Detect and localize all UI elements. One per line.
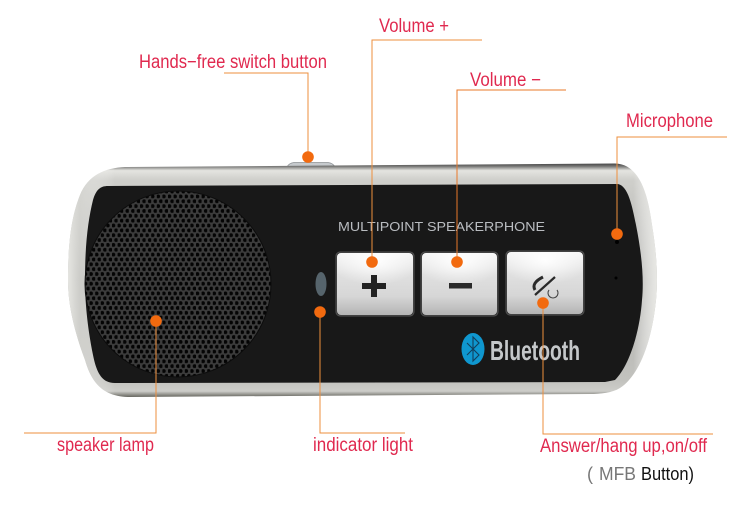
note: MFB button: ( <box>587 464 593 484</box>
side button <box>287 162 335 167</box>
speaker grille <box>85 191 271 377</box>
Bluetooth logo: Bluetooth <box>490 335 580 366</box>
Bluetooth logo <box>462 333 580 366</box>
indicator light window <box>316 272 326 296</box>
button: answer and power <box>506 251 584 315</box>
button: volume plus <box>336 252 414 316</box>
callout: indicator light: indicator light <box>313 435 414 456</box>
callout: volume minus <box>451 70 566 268</box>
black face <box>85 184 643 383</box>
callout: answer / hang up: Answer/hang up,on/off <box>540 436 708 457</box>
note: MFB button: MFB <box>599 464 636 484</box>
callout: speaker lamp: speaker lamp <box>57 435 154 456</box>
callout: speaker lamp <box>24 315 162 456</box>
button: volume minus <box>421 252 498 316</box>
callout: volume plus: Volume + <box>379 16 449 37</box>
device label: MULTIPOINT SPEAKERPHONE <box>338 219 545 234</box>
callout: answer / hang up <box>537 297 713 457</box>
callout: hands-free switch button <box>139 52 327 163</box>
device body <box>68 162 657 397</box>
callout: indicator light <box>313 306 414 456</box>
callout: microphone <box>611 111 727 240</box>
note: MFB button: Button) <box>641 464 694 484</box>
callout: microphone: Microphone <box>626 111 713 132</box>
note: MFB button <box>587 464 694 484</box>
callout: volume plus <box>366 16 482 268</box>
callout: hands-free switch button: Hands−free switch button <box>139 52 327 73</box>
callout: volume minus: Volume − <box>470 70 541 91</box>
silver bezel <box>68 164 657 397</box>
microphone holes <box>614 240 619 280</box>
